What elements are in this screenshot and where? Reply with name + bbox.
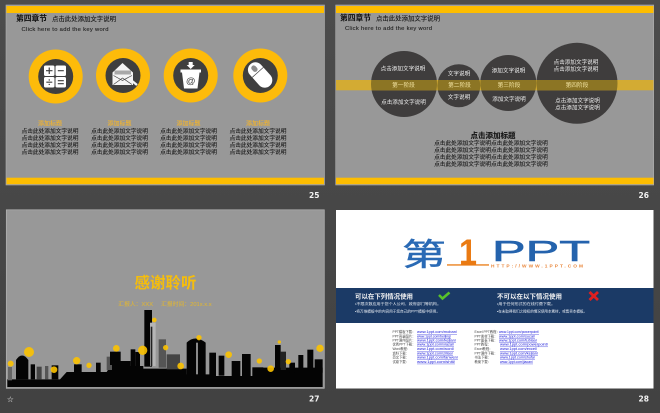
text block: column 3: 点击此处添加文字说明 bbox=[160, 148, 217, 156]
icon: at-sign cup bbox=[164, 48, 218, 102]
link list: 教案下载： bbox=[474, 359, 491, 364]
link list: 优秀PPT下载： bbox=[392, 342, 415, 347]
link list: www.1ppt.com/kejian/ bbox=[500, 351, 538, 355]
link list: www.1ppt.com/shiti/ bbox=[417, 360, 455, 364]
icon: envelope bbox=[96, 48, 150, 102]
link list bbox=[392, 329, 548, 364]
chart: four stage circles: 点击添加文字说明 bbox=[554, 58, 599, 66]
title: thanks: 感谢聆听 bbox=[134, 273, 197, 292]
stage band bbox=[336, 80, 654, 90]
text block: column 2: 点击此处添加文字说明 bbox=[91, 127, 148, 135]
text block: column 2: 点击此处添加文字说明 bbox=[91, 148, 148, 156]
usage band bbox=[336, 288, 654, 323]
text block: column 3: 点击此处添加文字说明 bbox=[160, 141, 217, 149]
link list: Excel教程： bbox=[474, 346, 492, 351]
chart: four stage circles: 点击添加文字说明 bbox=[381, 98, 426, 106]
link list: www.1ppt.com/word/ bbox=[417, 347, 454, 351]
link list: www.1ppt.com/ziliao/ bbox=[417, 351, 453, 355]
text block: column 1: 点击此处添加文字说明 bbox=[22, 134, 79, 142]
chart: four stage circles: 点击添加文字说明 bbox=[555, 104, 600, 112]
logo: 第1PPT: PPT bbox=[492, 236, 590, 268]
text block: slide 26 description: 点击此处添加文字说明点击此处添加文字说明 bbox=[434, 153, 548, 161]
text block: column 4: 点击此处添加文字说明 bbox=[230, 134, 287, 142]
page number 25: 25 bbox=[309, 191, 319, 200]
heading: slide 26: Click here to add the key word bbox=[345, 26, 432, 32]
logo: 第1PPT: HTTP://WWW.1PPT.COM bbox=[491, 264, 583, 270]
text block: column 2 bbox=[91, 120, 148, 156]
text block: slide 26 description: 点击此处添加文字说明点击此处添加文字说明 bbox=[434, 139, 548, 147]
link list: www.1ppt.com/xiazai/ bbox=[417, 343, 454, 347]
link list: www.1ppt.com/sucai/ bbox=[499, 334, 535, 338]
chart: four stage circles: 第二阶段 bbox=[448, 81, 471, 89]
link list: Word教程： bbox=[392, 346, 410, 351]
chart: four stage circles: 点击添加文字说明 bbox=[554, 65, 599, 73]
text block: column 2: 添加标题 bbox=[107, 120, 132, 128]
link list: www.1ppt.com/tubiao/ bbox=[499, 338, 537, 342]
text block: column 4: 添加标题 bbox=[246, 120, 270, 128]
heading: slide 25: 点击此处添加文字说明 bbox=[52, 14, 116, 23]
text block: column 3: 点击此处添加文字说明 bbox=[160, 134, 217, 142]
link list: 资料下载： bbox=[392, 350, 409, 355]
decorative yellow dots bbox=[8, 318, 324, 373]
text block: column 1: 点击此处添加文字说明 bbox=[22, 127, 79, 135]
text block: column 4 bbox=[230, 120, 287, 156]
usage band: •不限次数应用于您个人公司、政府部门等机构。 bbox=[355, 301, 441, 306]
text block: slide 26 description: 点击添加标题 bbox=[470, 130, 516, 140]
icon: red cross bbox=[590, 292, 598, 300]
chart: four stage circles: 点击添加文字说明 bbox=[555, 96, 600, 104]
logo: 第1PPT: 1 bbox=[459, 232, 477, 272]
chart: four stage circles: 添加文字说明 bbox=[492, 66, 526, 74]
link list: PPT教程： bbox=[474, 342, 491, 347]
text block: column 2: 点击此处添加文字说明 bbox=[91, 134, 148, 142]
text block: column 1: 添加标题 bbox=[38, 120, 62, 128]
page number 26: 26 bbox=[638, 191, 649, 200]
heading: slide 26 bbox=[340, 12, 440, 32]
link list: PPT模板下载： bbox=[392, 329, 415, 334]
icon: green check bbox=[439, 292, 450, 298]
chart: four stage circles: 点击添加文字说明 bbox=[381, 64, 426, 72]
heading: slide 25: Click here to add the key word bbox=[22, 27, 108, 33]
heading: slide 26: 第四章节 bbox=[340, 12, 371, 22]
text block: column 4: 点击此处添加文字说明 bbox=[230, 141, 287, 149]
page number 27: 27 bbox=[309, 394, 319, 404]
text block: column 4: 点击此处添加文字说明 bbox=[230, 127, 287, 135]
link list: PPT背景图片： bbox=[392, 333, 415, 338]
link list: 范文下载： bbox=[392, 354, 409, 360]
link list: PPT素材下载： bbox=[474, 333, 497, 338]
heading: slide 25: 第四章节 bbox=[16, 13, 47, 23]
chart: four stage circles: 添加文字说明 bbox=[492, 95, 526, 103]
heading: slide 26: 点击此处添加文字说明 bbox=[376, 14, 440, 22]
usage band: •在未取得我们之授权的情况使用本素材，或售卖本模板。 bbox=[497, 308, 587, 314]
link list: 书法下载： bbox=[474, 354, 491, 360]
icon: computer mouse bbox=[233, 48, 287, 102]
chart: four stage circles: 文字说明 bbox=[448, 93, 471, 101]
text block: column 3: 添加标题 bbox=[176, 120, 201, 128]
text block: column 3 bbox=[160, 120, 217, 156]
usage band: •用于任何形式的在线付费下载。 bbox=[497, 301, 555, 306]
heading: slide 25 bbox=[16, 13, 116, 33]
icon: calculator bbox=[29, 50, 83, 104]
link list: www.1ppt.com/shufa/ bbox=[500, 356, 535, 360]
chart: four stage circles: 第四阶段 bbox=[566, 81, 589, 89]
text block: column 1: 点击此处添加文字说明 bbox=[22, 148, 79, 156]
usage band: •将万维模板中的内容用于您自己的PPT模板中使用。 bbox=[355, 308, 440, 314]
page number 28: 28 bbox=[638, 394, 649, 404]
text block: slide 26 description bbox=[434, 130, 548, 168]
icon: favourite star: ☆ bbox=[7, 395, 14, 404]
text block: slide 26 description: 点击此处添加文字说明点击此处添加文字说明 bbox=[434, 160, 548, 168]
link list: www.1ppt.com/powerpoint/ bbox=[500, 343, 548, 347]
text block: slide 26 description: 点击此处添加文字说明点击此处添加文字说明 bbox=[434, 146, 548, 154]
text block: column 4: 点击此处添加文字说明 bbox=[230, 148, 287, 156]
link list: PPT课件图片： bbox=[392, 338, 415, 342]
text block: column 2: 点击此处添加文字说明 bbox=[91, 141, 148, 149]
link list: Excel PPT教程： bbox=[474, 329, 500, 334]
text block: column 3: 点击此处添加文字说明 bbox=[160, 127, 217, 135]
usage band: 不可以在以下情况使用 bbox=[497, 292, 562, 300]
panel: slide 27 bbox=[6, 210, 324, 388]
chart: four stage circles: 文字说明 bbox=[448, 70, 471, 78]
chart: four stage circles bbox=[336, 43, 654, 124]
chart: four stage circles: 第三阶段 bbox=[498, 81, 521, 89]
panel: slide 28 bbox=[336, 210, 654, 388]
chart: four stage circles: 第一阶段 bbox=[392, 81, 415, 89]
link list: 试卷下载： bbox=[392, 359, 409, 364]
link list: PPT课件下载： bbox=[474, 350, 497, 355]
link list: www.1ppt.com/powerpoint/ bbox=[499, 330, 539, 334]
text: presenter line: 汇报人：XXX 汇报时间：201x.x.x bbox=[118, 300, 212, 308]
link list: www.1ppt.com/moban/ bbox=[417, 330, 457, 334]
panel: slide 25 bbox=[6, 5, 324, 185]
usage band: 可以在下列情况使用 bbox=[355, 292, 413, 300]
logo: 第1PPT bbox=[402, 232, 590, 272]
illustration: city skyline bbox=[7, 310, 324, 387]
panel: slide 26 bbox=[336, 5, 654, 185]
link list: www.1ppt.com/beijing/ bbox=[417, 334, 451, 338]
logo: 第1PPT: 第 bbox=[402, 238, 446, 272]
link list: www.1ppt.com/kejian/ bbox=[417, 338, 456, 342]
text block: column 1 bbox=[22, 120, 79, 156]
link list: www.1ppt.com/excel/ bbox=[500, 347, 537, 351]
link list: PPT图表下载： bbox=[474, 338, 497, 342]
link list: www.1ppt.com/jiaoan/ bbox=[500, 360, 533, 364]
link list: www.1ppt.com/fanwen/ bbox=[417, 356, 458, 360]
text block: column 1: 点击此处添加文字说明 bbox=[22, 141, 79, 149]
icon: at-sign cup: @ bbox=[186, 76, 196, 87]
